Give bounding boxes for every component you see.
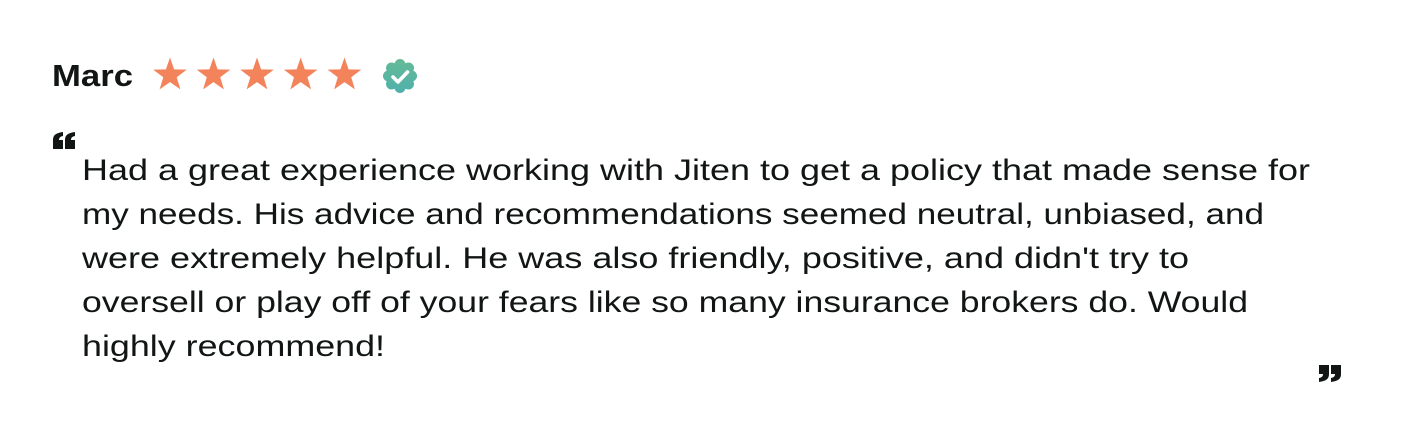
closing quotation mark [1319,365,1341,382]
review text: were extremely helpful. He was also friendly, positive, and didn't try to [81,242,1189,275]
star rating [153,58,361,89]
review text: my needs. His advice and recommendations seemed neutral, unbiased, and [82,198,1264,231]
reviewer name: Marc [52,58,133,93]
review text: oversell or play off of your fears like so many insurance brokers do. Would [82,286,1248,319]
opening quotation mark [53,132,75,149]
review text: highly recommend! [82,330,385,363]
icon: verified badge [383,59,417,93]
review text [81,154,1310,363]
review text: Had a great experience working with Jiten to get a policy that made sense for [82,154,1310,187]
